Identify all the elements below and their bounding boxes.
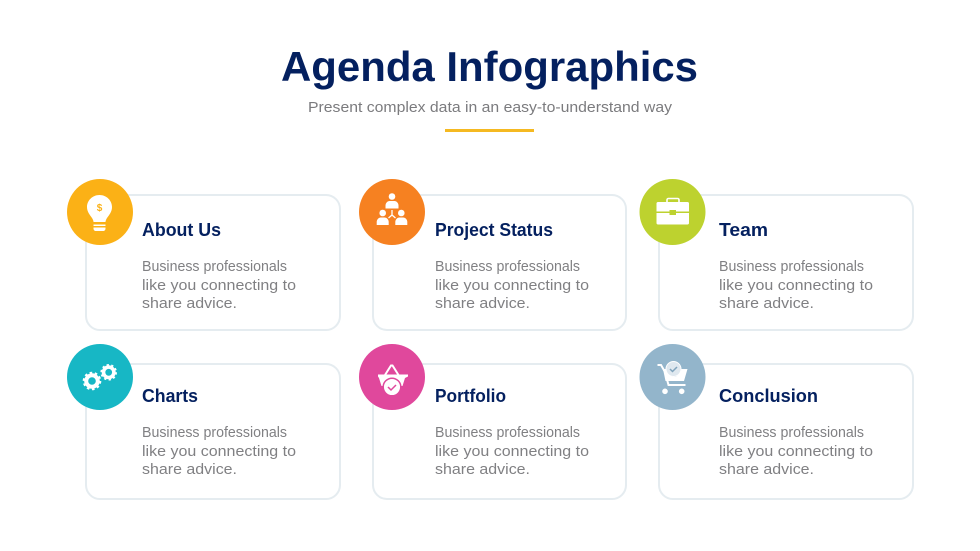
icon: shopping cart with check [640, 344, 706, 410]
icon: briefcase [640, 179, 706, 245]
text block: like you connecting to [435, 443, 589, 460]
text block: share advice. [719, 295, 814, 312]
text block: Business professionals [435, 258, 580, 275]
icon: basket with check [359, 344, 425, 410]
panel: project status [359, 179, 626, 330]
text block: share advice. [142, 461, 237, 478]
panel: team [640, 179, 913, 330]
heading: Team [719, 219, 768, 240]
text block: like you connecting to [142, 277, 296, 294]
accent bar [445, 129, 534, 132]
text block: Business professionals [142, 258, 287, 275]
text block: like you connecting to [435, 277, 589, 294]
title: Agenda Infographics [281, 43, 698, 90]
text block: Business professionals [142, 424, 287, 441]
icon: light bulb: $ [97, 203, 103, 214]
text block: Business professionals [719, 258, 864, 275]
text block: like you connecting to [719, 277, 873, 294]
subtitle: Present complex data in an easy-to-understand way [308, 99, 673, 116]
heading: About Us [142, 219, 221, 240]
panel: about us [67, 179, 340, 330]
text block [435, 424, 589, 478]
icon: light bulb [67, 179, 133, 245]
text block: like you connecting to [142, 443, 296, 460]
heading: Project Status [435, 219, 553, 240]
text block [142, 258, 296, 312]
text block [142, 424, 296, 478]
text block [435, 258, 589, 312]
heading: Portfolio [435, 385, 506, 406]
text block: like you connecting to [719, 443, 873, 460]
icon: gears [67, 344, 133, 410]
icon: team hierarchy [359, 179, 425, 245]
panel: conclusion [640, 344, 913, 499]
text block: share advice. [719, 461, 814, 478]
panel: charts [67, 344, 340, 499]
text block: share advice. [142, 295, 237, 312]
heading: Conclusion [719, 385, 818, 406]
panel: portfolio [359, 344, 626, 499]
heading: Charts [142, 385, 198, 406]
text block: Business professionals [719, 424, 864, 441]
text block: Business professionals [435, 424, 580, 441]
text block: share advice. [435, 295, 530, 312]
text block [719, 258, 873, 312]
text block [719, 424, 873, 478]
text block: share advice. [435, 461, 530, 478]
